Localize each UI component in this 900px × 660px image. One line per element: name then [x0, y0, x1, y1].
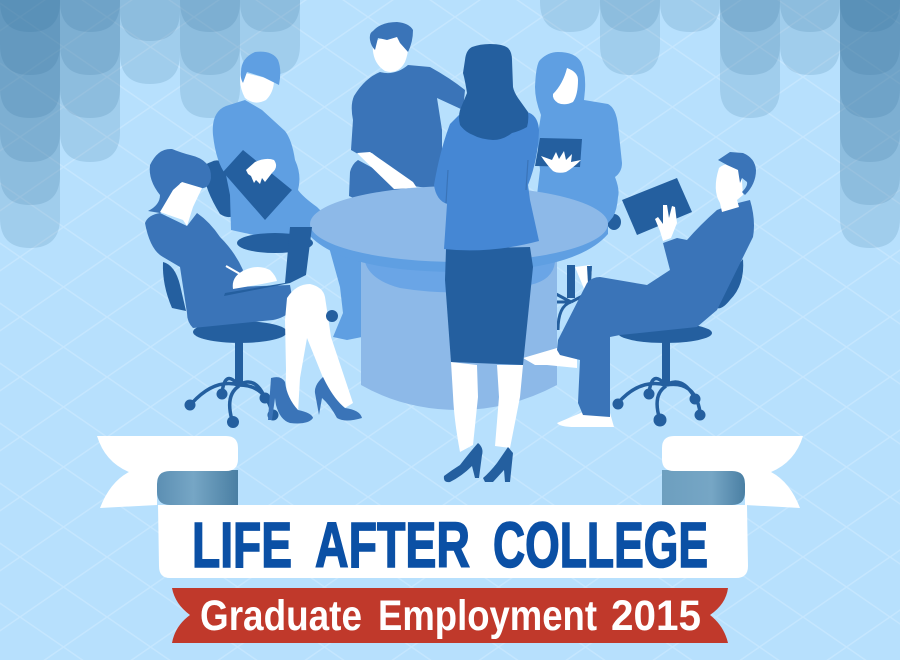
subtitle text: Employment	[378, 592, 597, 640]
title text	[192, 509, 708, 581]
ribbon main white band	[158, 505, 748, 578]
round table	[310, 186, 608, 410]
scalloped curtain: right	[540, 0, 900, 248]
ribbon right tail	[662, 436, 803, 508]
person: seated man in light blue with folder	[203, 52, 362, 340]
ribbon left tail	[97, 436, 238, 508]
title text: COLLEGE	[493, 509, 708, 581]
person: seated woman at right of table, behind it	[530, 52, 622, 330]
subtitle text	[200, 592, 701, 640]
subtitle text: 2015	[611, 592, 701, 640]
title text: LIFE	[192, 509, 292, 581]
ribbon banner: title	[97, 436, 803, 643]
person: man standing behind table	[349, 22, 465, 210]
chair: right man	[612, 259, 743, 426]
scalloped curtain: left	[0, 0, 300, 248]
person: standing woman seen from behind	[434, 44, 539, 482]
title text: AFTER	[315, 509, 470, 581]
person: seated woman taking notes	[145, 149, 362, 428]
red subtitle band	[172, 588, 728, 643]
chair: left woman	[163, 262, 287, 428]
person: reclining man with book	[523, 152, 756, 427]
subtitle text: Graduate	[200, 592, 362, 640]
